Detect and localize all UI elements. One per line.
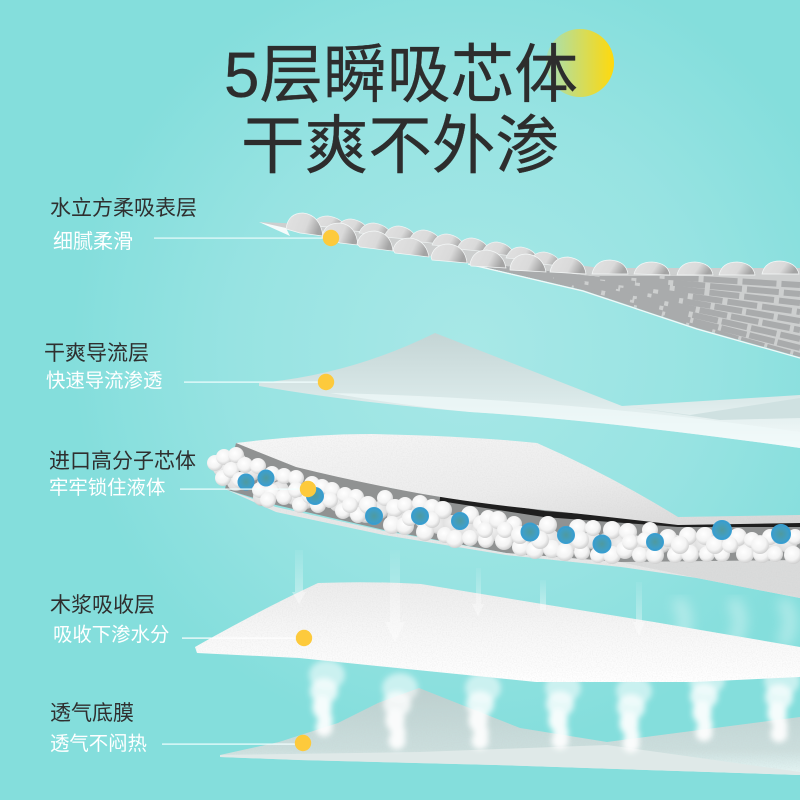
downward absorption arrows [292, 550, 645, 642]
marker [318, 374, 334, 390]
heading: 木浆吸收层 [50, 594, 155, 617]
layer 3: polymer core [207, 434, 800, 598]
marker [300, 481, 316, 497]
heading: 进口高分子芯体 [49, 450, 196, 473]
heading: 水立方柔吸表层 [50, 197, 197, 220]
layer 5: breathable base film [220, 688, 800, 775]
description: 吸收下渗水分 [53, 624, 169, 646]
rear beads [213, 453, 797, 555]
label 4 [50, 594, 312, 646]
heading: 透气底膜 [50, 702, 134, 725]
leader line [182, 638, 303, 639]
label 1 [50, 197, 339, 253]
back row of bumps [312, 216, 562, 266]
layer 4: wood pulp absorbent sheet [195, 582, 800, 682]
sun accent circle [546, 29, 614, 97]
marker [323, 230, 339, 246]
description: 快速导流渗透 [46, 370, 162, 392]
description: 牢牢锁住液体 [49, 477, 165, 499]
title line 2: 干爽不外渗 [241, 110, 559, 182]
marker [295, 735, 311, 751]
interior of core [225, 443, 800, 564]
heading: 干爽导流层 [44, 342, 149, 365]
description: 细腻柔滑 [53, 230, 133, 253]
white absorbent beads [207, 447, 800, 564]
label 2 [44, 342, 334, 392]
steam rising through the breathable film [309, 660, 800, 752]
label 3 [49, 450, 316, 499]
leader line [162, 744, 303, 745]
top core sheet [236, 434, 800, 525]
label 5 [50, 702, 311, 755]
layer 1: water cube surface sheet [259, 213, 800, 358]
leader line [154, 238, 330, 239]
layer 2: dry guide film [259, 333, 800, 448]
front row of bumps [286, 213, 799, 275]
blue liquid droplets [238, 470, 790, 553]
faint steam above the pulp sheet [680, 605, 790, 640]
marker [296, 630, 312, 646]
leader line [184, 382, 326, 383]
title line 1: 5层瞬吸芯体 [224, 39, 578, 111]
title block [224, 29, 614, 182]
description: 透气不闷热 [50, 733, 147, 755]
leader line [180, 488, 308, 490]
dark gap under top sheet [440, 498, 800, 524]
lower tray [225, 489, 800, 598]
